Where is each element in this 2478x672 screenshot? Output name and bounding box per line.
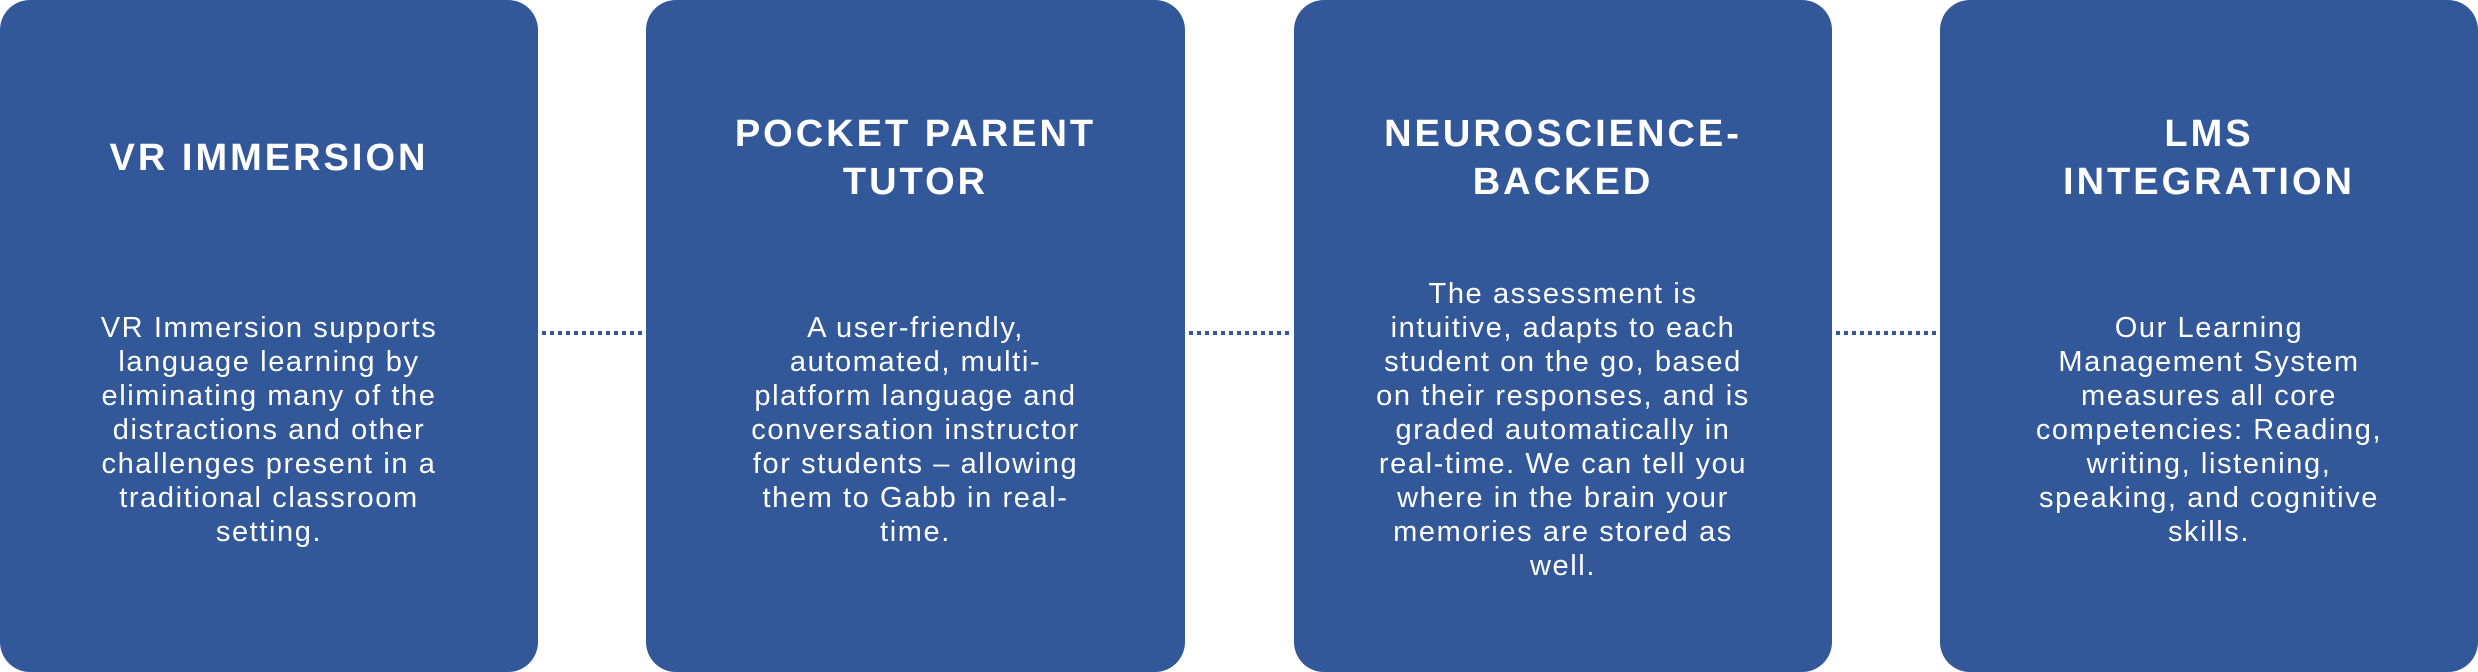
- text: VR immersion description: challenges present in a: [101, 448, 437, 480]
- text: tutor description: time.: [880, 516, 951, 548]
- heading: neuroscience-backed: [1384, 113, 1742, 203]
- connector 3: [1836, 331, 1938, 335]
- panel: LMS integration: [1940, 0, 2478, 672]
- text: tutor description: conversation instructor: [751, 414, 1080, 446]
- heading: pocket parent tutor: TUTOR: [843, 161, 988, 203]
- text: LMS description: competencies: Reading,: [2036, 414, 2382, 446]
- text: LMS description: writing, listening,: [2087, 448, 2331, 480]
- panel: VR immersion: [0, 0, 538, 672]
- connector 1: [542, 331, 644, 335]
- text: VR immersion description: setting.: [216, 516, 322, 548]
- text: neuroscience description: student on the go, based: [1384, 346, 1742, 378]
- text: neuroscience description: real-time. We can tell you: [1379, 448, 1747, 480]
- heading: LMS integration: LMS: [2164, 113, 2254, 155]
- text: neuroscience description: The assessment is: [1429, 278, 1697, 310]
- text: LMS description: speaking, and cognitive: [2039, 482, 2379, 514]
- text: tutor description: platform language and: [754, 380, 1077, 412]
- text: neuroscience description: memories are stored as: [1393, 516, 1733, 548]
- heading: neuroscience-backed: BACKED: [1473, 161, 1653, 203]
- text: tutor description: for students – allowing: [753, 448, 1078, 480]
- panel: pocket parent tutor: [646, 0, 1185, 672]
- heading: pocket parent tutor: [735, 113, 1096, 203]
- text: VR immersion description: [100, 312, 437, 548]
- text: VR immersion description: distractions and other: [113, 414, 425, 446]
- heading: LMS integration: INTEGRATION: [2063, 161, 2355, 203]
- text: neuroscience description: [1376, 278, 1750, 582]
- text: tutor description: automated, multi-: [790, 346, 1041, 378]
- heading: pocket parent tutor: POCKET PARENT: [735, 113, 1096, 155]
- text: LMS description: Management System: [2058, 346, 2360, 378]
- text: tutor description: A user-friendly,: [807, 312, 1024, 344]
- text: LMS description: [2036, 312, 2382, 548]
- text: VR immersion description: VR Immersion supports: [101, 312, 437, 344]
- text: neuroscience description: intuitive, adapts to each: [1391, 312, 1735, 344]
- heading: neuroscience-backed: NEUROSCIENCE-: [1384, 113, 1742, 155]
- panel: neuroscience-backed: [1294, 0, 1832, 672]
- text: neuroscience description: well.: [1530, 550, 1596, 582]
- text: LMS description: skills.: [2168, 516, 2250, 548]
- text: tutor description: [751, 312, 1080, 548]
- text: VR immersion description: eliminating many of the: [101, 380, 436, 412]
- text: LMS description: Our Learning: [2115, 312, 2303, 344]
- text: tutor description: them to Gabb in real-: [762, 482, 1068, 514]
- text: VR immersion description: traditional classroom: [119, 482, 419, 514]
- text: LMS description: measures all core: [2081, 380, 2337, 412]
- text: neuroscience description: where in the brain your: [1397, 482, 1729, 514]
- heading: LMS integration: [2063, 113, 2355, 203]
- text: neuroscience description: graded automatically in: [1395, 414, 1731, 446]
- connector 2: [1189, 331, 1291, 335]
- text: VR immersion description: language learning by: [118, 346, 420, 378]
- text: neuroscience description: on their responses, and is: [1376, 380, 1750, 412]
- heading: VR immersion: VR IMMERSION: [110, 137, 428, 179]
